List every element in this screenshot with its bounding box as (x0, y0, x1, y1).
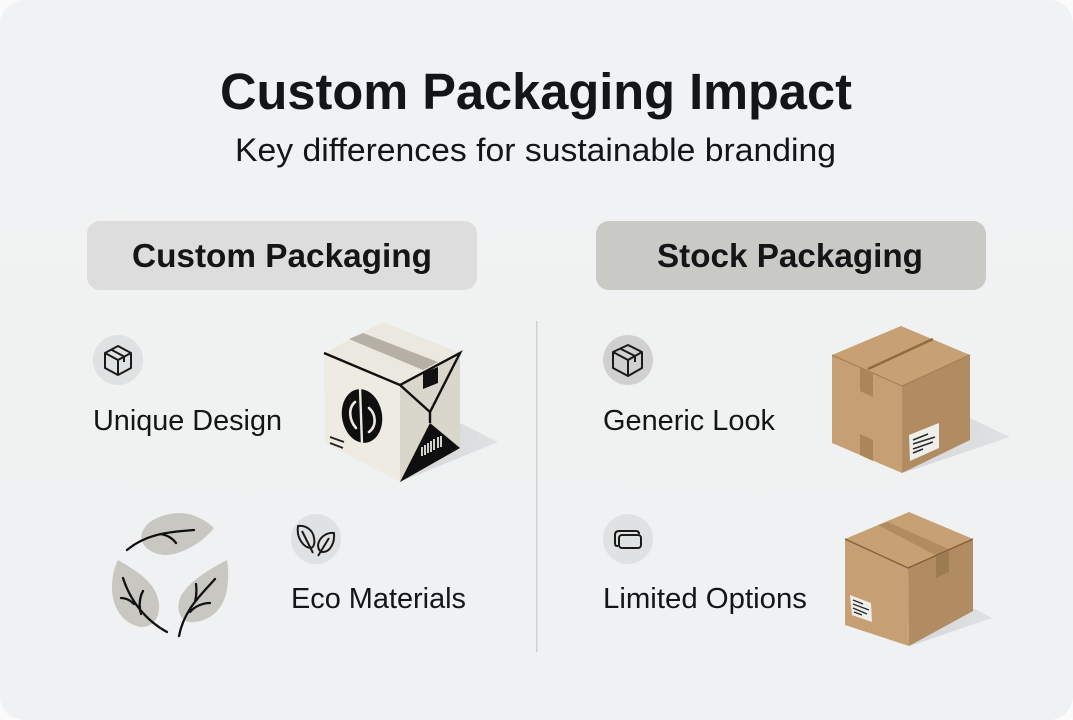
label: generic look: Generic Look (603, 405, 775, 437)
icon: unique design box (93, 335, 143, 385)
leaf: right (178, 560, 228, 636)
illustration: stock box closed (845, 512, 992, 646)
panel: stock packaging heading (596, 221, 986, 290)
panel: stock packaging heading: Stock Packaging (657, 237, 923, 274)
panel: custom packaging heading: Custom Packaging (132, 237, 432, 274)
illustration: stock box with label (832, 326, 1010, 473)
title: Custom Packaging Impact (220, 63, 852, 120)
icon: generic box (603, 335, 653, 385)
leaf: top (127, 513, 214, 555)
illustration: custom branded box (324, 322, 498, 482)
panel: custom packaging heading (87, 221, 477, 290)
icon: eco sprout (291, 514, 341, 564)
center divider (536, 321, 538, 652)
label: unique design: Unique Design (93, 405, 282, 437)
leaf: left (112, 560, 167, 632)
label: limited options: Limited Options (603, 583, 807, 615)
illustration: three leaves (112, 513, 228, 636)
label: eco materials: Eco Materials (291, 583, 466, 615)
subtitle: Key differences for sustainable branding (235, 132, 836, 168)
icon: limited options cards (603, 514, 653, 564)
